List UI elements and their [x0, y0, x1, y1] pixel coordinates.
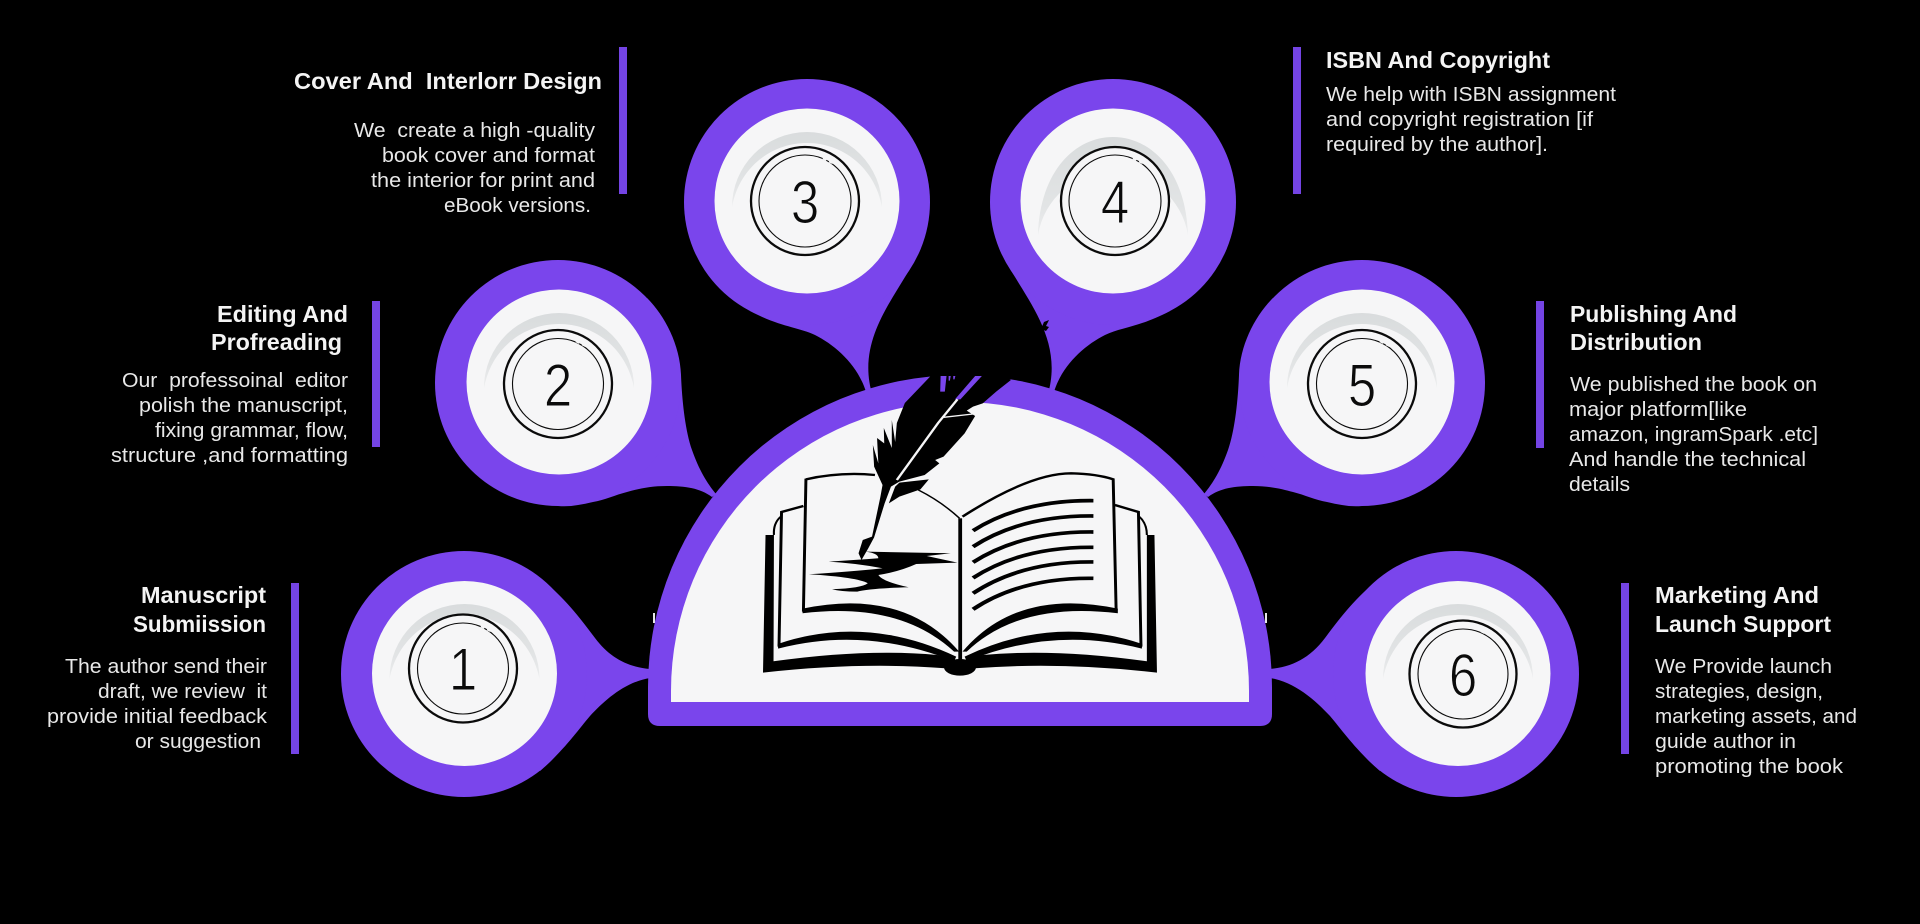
- text block: step 3: the interior for print and: [371, 169, 595, 192]
- writing lines on right page: [973, 501, 1093, 609]
- text block: step 4: [1293, 47, 1616, 194]
- text block: step 1: or suggestion: [135, 730, 261, 753]
- pin 3: 3: [791, 169, 819, 236]
- text block: step 2: Our professoinal editor: [122, 369, 348, 392]
- text block: step 4: and copyright registration [if: [1326, 108, 1593, 131]
- pin 2: 2: [544, 352, 572, 419]
- pin 3: [684, 79, 930, 392]
- pin 1: [341, 551, 650, 797]
- text block: step 2: polish the manuscript,: [139, 394, 348, 417]
- text block: step 6: We Provide launch: [1655, 655, 1832, 678]
- text block: step 3: We create a high -quality: [354, 119, 596, 142]
- text block: step 3: eBook versions.: [444, 194, 591, 217]
- pin 1: 1: [449, 636, 477, 703]
- text block: step 5: details: [1569, 473, 1630, 496]
- text block: step 1: draft, we review it: [98, 680, 267, 703]
- text block: step 1: Manuscript: [141, 582, 266, 608]
- text block: step 1: The author send their: [65, 655, 267, 678]
- text block: step 6: Marketing And: [1655, 582, 1819, 608]
- text block: step 6: Launch Support: [1655, 611, 1831, 637]
- text block: step 4: We help with ISBN assignment: [1326, 83, 1616, 106]
- text block: step 3: Cover And Interlorr Design: [294, 68, 602, 94]
- text block: step 2: fixing grammar, flow,: [155, 419, 348, 442]
- pin 5: 5: [1348, 352, 1376, 419]
- text block: step 6: [1621, 582, 1857, 778]
- text block: step 5: And handle the technical: [1569, 448, 1806, 471]
- pin 5: [1204, 260, 1485, 506]
- text block: step 3: book cover and format: [382, 144, 595, 167]
- text block: step 2: structure ,and formatting: [111, 444, 348, 467]
- pin 2: [435, 260, 716, 506]
- text block: step 1: provide initial feedback: [47, 705, 268, 728]
- text block: step 1: [47, 582, 299, 754]
- text block: step 5: We published the book on: [1570, 373, 1817, 396]
- central dome panel: [648, 375, 1272, 726]
- text block: step 3: [294, 47, 627, 217]
- text block: step 4: ISBN And Copyright: [1326, 47, 1550, 73]
- icon: open book with quill: [763, 373, 1157, 676]
- ink strokes on left page: [809, 552, 957, 592]
- text block: step 6: marketing assets, and: [1655, 705, 1857, 728]
- text block: step 6: promoting the book: [1655, 755, 1844, 778]
- text block: step 5: Publishing And: [1570, 301, 1737, 327]
- text block: step 2: [111, 301, 380, 467]
- pin 4: 4: [1101, 169, 1129, 236]
- text block: step 2: Editing And: [217, 301, 348, 327]
- text block: step 5: amazon, ingramSpark .etc]: [1569, 423, 1818, 446]
- text block: step 1: Submiission: [133, 611, 266, 637]
- book covers and pages: [763, 473, 1157, 676]
- pin 6: [1270, 551, 1579, 797]
- text block: step 2: Profreading: [211, 329, 342, 355]
- pin 6: 6: [1449, 642, 1477, 709]
- text block: step 5: Distribution: [1570, 329, 1702, 355]
- text block: step 6: strategies, design,: [1655, 680, 1823, 703]
- pin 4: [990, 79, 1236, 392]
- text block: step 5: major platform[like: [1569, 398, 1747, 421]
- quill feather: [859, 373, 1011, 560]
- text block: step 6: guide author in: [1655, 730, 1796, 753]
- text block: step 4: required by the author].: [1326, 133, 1548, 156]
- text block: step 5: [1536, 301, 1818, 496]
